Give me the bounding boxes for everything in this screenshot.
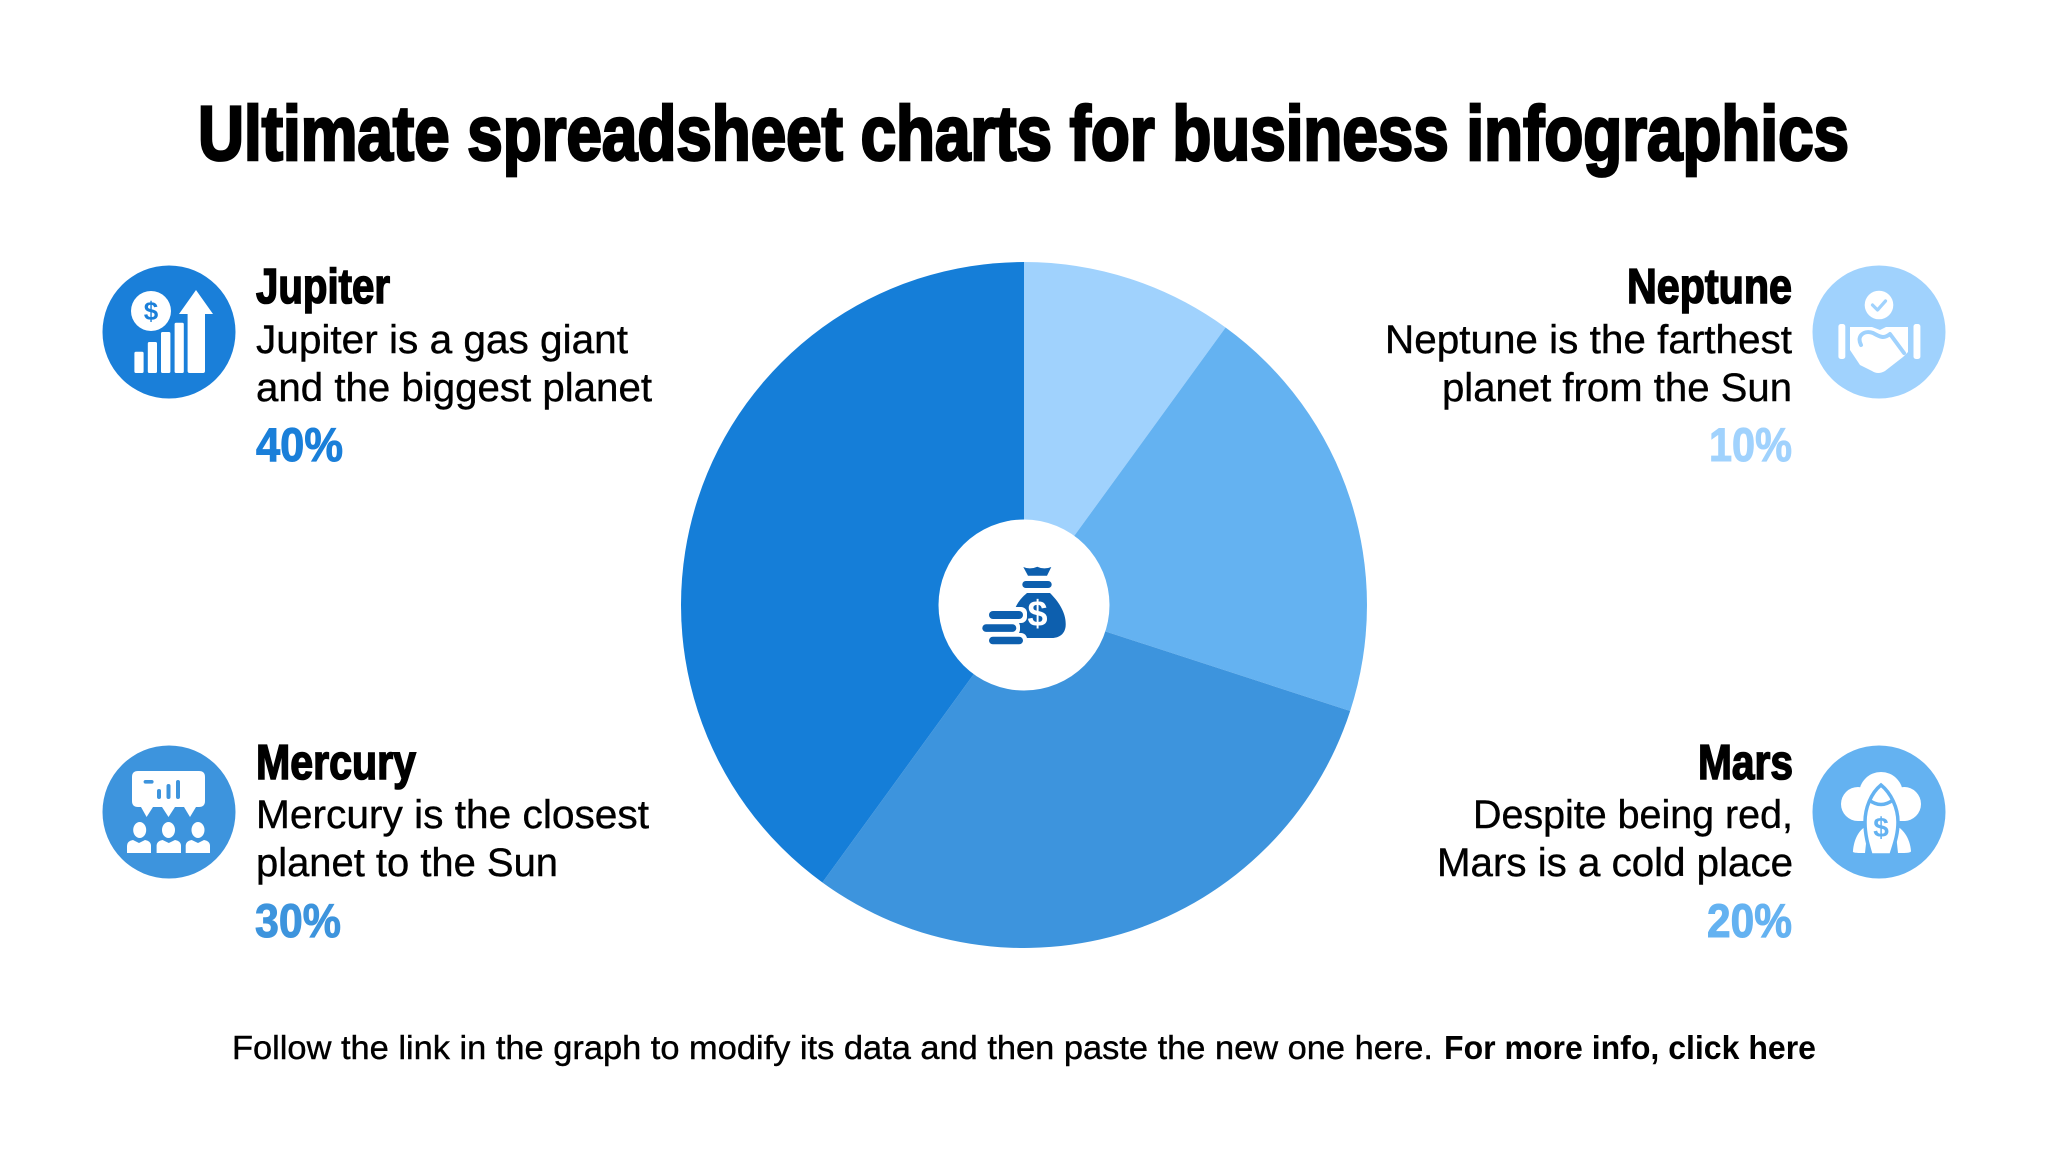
icon: growth chart with dollar xyxy=(102,266,236,398)
heading: Mercury: Mercury xyxy=(256,736,416,790)
description: Jupiter xyxy=(256,318,652,410)
icon: audience with chart bubble xyxy=(102,746,236,878)
description: Neptune: Neptune is the farthest xyxy=(1385,318,1792,362)
center hole xyxy=(938,520,1110,690)
icon: rocket and cloud: $ xyxy=(1873,812,1889,843)
icon: growth chart with dollar: $ xyxy=(144,296,159,326)
icon: rocket and cloud xyxy=(1812,746,1946,878)
heading: Jupiter: Jupiter xyxy=(256,260,390,314)
value: 10%: 10% xyxy=(1709,418,1792,471)
description: Neptune: planet from the Sun xyxy=(1442,366,1792,410)
value: 20%: 20% xyxy=(1707,894,1792,947)
description: Neptune xyxy=(1385,318,1792,410)
footer note: Follow the link in the graph to modify its data and then paste the new one here. xyxy=(232,1029,1433,1066)
description: Mercury: planet to the Sun xyxy=(256,841,558,885)
pie chart xyxy=(681,262,1367,948)
icon: money bag and coins xyxy=(978,567,1066,648)
slice: Mars 20% xyxy=(1024,328,1367,711)
slice: Neptune 10% xyxy=(1024,262,1226,605)
icon: money bag and coins: $ xyxy=(1027,593,1048,634)
description: Mars xyxy=(1437,793,1793,885)
footer note: For more info, click here xyxy=(1444,1029,1816,1066)
description: Mercury xyxy=(256,793,649,885)
panel: Neptune xyxy=(1385,260,1946,471)
description: Mars: Mars is a cold place xyxy=(1437,841,1793,885)
description: Mercury: Mercury is the closest xyxy=(256,793,649,837)
heading: Neptune: Neptune xyxy=(1627,260,1792,314)
panel: Mars xyxy=(1437,736,1946,947)
description: Jupiter: and the biggest planet xyxy=(256,366,652,410)
heading: Mars: Mars xyxy=(1698,736,1793,790)
description: Mars: Despite being red, xyxy=(1473,793,1793,837)
value: 40%: 40% xyxy=(256,418,343,471)
value: 30%: 30% xyxy=(255,894,341,947)
slice: Mercury 30% xyxy=(822,605,1350,948)
slice: Jupiter 40% xyxy=(681,262,1024,882)
icon: handshake with check xyxy=(1812,266,1946,398)
panel: Jupiter xyxy=(102,260,652,471)
panel: Mercury xyxy=(102,736,649,947)
description: Jupiter: Jupiter is a gas giant xyxy=(256,318,628,362)
